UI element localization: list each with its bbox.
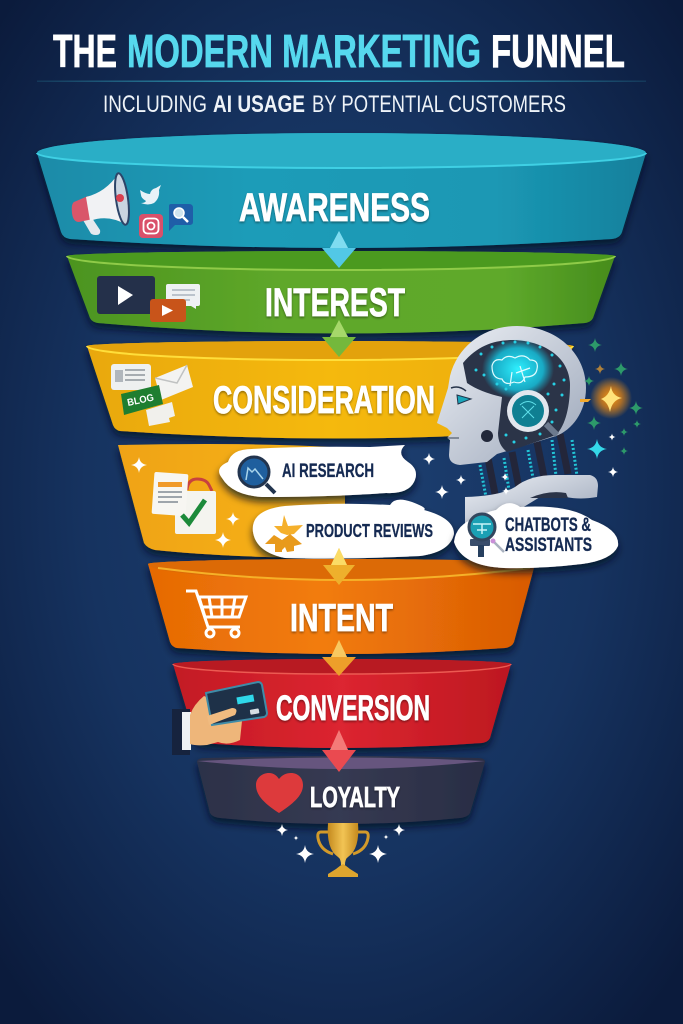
label: consideration: CONSIDERATION — [213, 379, 435, 422]
icon: heart — [256, 773, 303, 813]
panel: awareness — [37, 133, 646, 248]
callout: chatbots and assistants: ASSISTANTS — [505, 535, 592, 556]
icon: document card — [111, 364, 151, 390]
label: chatbots and assistants: CHATBOTS & — [505, 515, 591, 536]
panel: conversion — [172, 659, 511, 755]
icon: sparkle field — [456, 338, 643, 495]
title: MODERN MARKETING — [127, 25, 481, 77]
arrow: intent to conversion — [322, 640, 356, 676]
icon: social bird — [140, 185, 161, 204]
arrow: interest to consideration — [322, 320, 356, 357]
icon: review stars — [265, 515, 303, 552]
icon: checklist and bag — [152, 472, 216, 534]
arrow: awareness to interest — [322, 231, 356, 268]
subtitle: AI USAGE — [213, 91, 305, 118]
panel: loyalty — [197, 756, 485, 824]
callout: product reviews — [253, 500, 454, 559]
panel: ai usage band — [118, 444, 449, 558]
robot: AI head — [437, 326, 598, 525]
icon: bot magnifier — [469, 514, 504, 557]
icon: jaw bolt — [481, 430, 493, 442]
label: interest: INTEREST — [265, 281, 405, 325]
label: awareness: AWARENESS — [239, 186, 430, 230]
arrow: conversion to loyalty — [322, 730, 356, 772]
icon: hand with card — [172, 682, 267, 755]
icon: instagram — [139, 214, 163, 238]
icon: head — [437, 326, 586, 465]
panel: intent — [148, 559, 535, 654]
panel: consideration — [87, 341, 573, 438]
subtitle: INCLUDING — [103, 91, 207, 118]
icon: shopping cart — [186, 591, 246, 637]
callout: ai research — [219, 445, 416, 497]
icon: neck pistons — [480, 434, 577, 497]
callout: chatbots and assistants — [454, 503, 618, 568]
icon: ear magnifier — [507, 390, 557, 435]
title: THE — [53, 25, 117, 77]
icon: glowing brain — [482, 339, 554, 399]
icon: orange play button — [150, 299, 186, 322]
icon: shoulder — [465, 475, 598, 525]
icon: eye — [451, 387, 471, 404]
arrow: consideration flow — [323, 548, 355, 585]
subtitle: BY POTENTIAL CUSTOMERS — [312, 91, 566, 118]
icon: search bubble — [169, 204, 193, 231]
icon: megaphone — [72, 172, 132, 235]
icon: trophy sparkles — [276, 824, 405, 863]
icon: video player — [97, 276, 155, 314]
icon: blog tag: BLOG — [126, 393, 155, 409]
icon: circuit dots — [474, 340, 566, 444]
label: intent: INTENT — [290, 597, 393, 640]
title: FUNNEL — [491, 25, 625, 77]
icon: envelope — [155, 365, 193, 400]
label: ai research: AI RESEARCH — [282, 461, 374, 482]
label: loyalty: LOYALTY — [310, 782, 400, 814]
label: conversion: CONVERSION — [276, 689, 430, 728]
icon: magnifier — [239, 457, 275, 493]
icon: blog tag — [121, 385, 163, 415]
icon: paper — [146, 402, 175, 426]
label: product reviews: PRODUCT REVIEWS — [306, 520, 433, 541]
panel: interest — [67, 251, 615, 334]
icon: chat bubble — [166, 284, 200, 309]
icon: sparkles — [131, 453, 449, 548]
icon: trophy — [318, 823, 368, 877]
subtitle — [103, 91, 566, 118]
icon: circuit skull — [463, 340, 570, 452]
